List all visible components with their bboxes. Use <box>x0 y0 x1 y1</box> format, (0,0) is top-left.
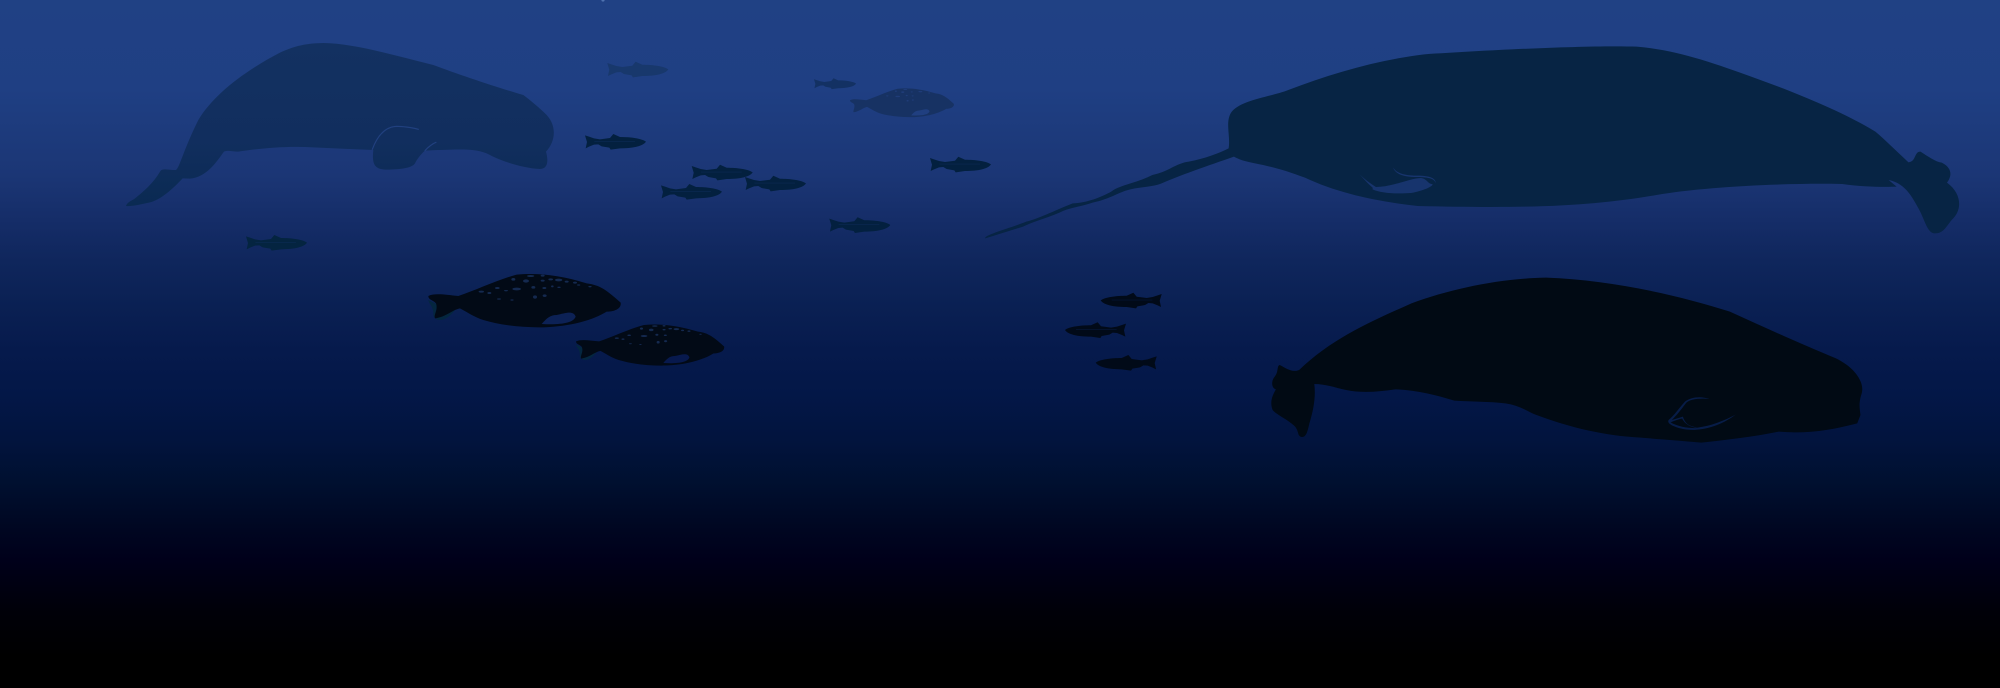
fish: dark blue school 3 <box>745 176 806 191</box>
distant seal flipper patch <box>911 109 930 116</box>
fish: dark blue school 6 <box>829 217 890 233</box>
bowhead flipper marking <box>1668 397 1736 430</box>
small surface speck <box>601 0 605 2</box>
small seal spots <box>615 325 702 345</box>
distant seal spots <box>886 89 930 102</box>
fish: black, facing right 1 <box>1101 293 1162 308</box>
small seal flipper patch <box>663 354 689 363</box>
fish: dark blue school 5 <box>930 157 991 172</box>
beluga flipper highlights <box>372 126 436 151</box>
beluga whale silhouette <box>126 43 554 206</box>
fish: black, facing right 3 <box>1096 355 1157 371</box>
fish: black, facing right 2 <box>1065 322 1126 338</box>
fish: dark blue school 4 <box>661 184 722 200</box>
large spotted seal <box>428 274 621 327</box>
bowhead whale silhouette <box>1271 278 1862 443</box>
fish: dark blue school 1 <box>585 134 646 150</box>
fish: pale, upper left <box>607 62 668 77</box>
fish: teal, left <box>246 235 307 251</box>
narwhal flipper marking <box>1358 167 1436 193</box>
seal spots <box>479 275 592 301</box>
fish: dark blue school 2 <box>692 165 753 180</box>
fish: pale small, upper centre <box>814 78 856 89</box>
small spotted seal <box>576 324 724 366</box>
faint distant seal <box>850 88 954 117</box>
seal flipper patch <box>542 313 576 324</box>
narwhal silhouette with tusk <box>985 46 1959 238</box>
